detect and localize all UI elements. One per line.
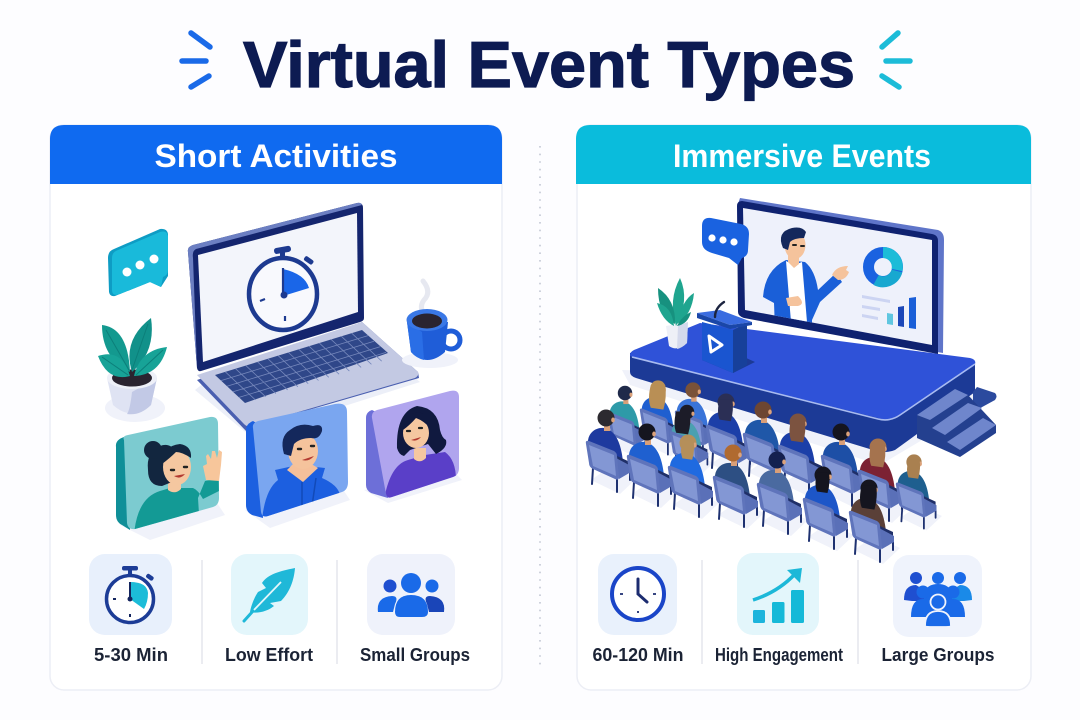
panel header: immersive events: Immersive Events [673,138,931,174]
icon: left title sparks [182,33,210,87]
icon: right title sparks [882,33,910,87]
panel: immersive events [576,125,1031,690]
icon: speech bubble [702,218,749,265]
title: Virtual Event Types [243,28,855,101]
stat: Large Groups: Large Groups [882,645,994,665]
icon: chat bubble [108,229,168,296]
panel header: short activities [50,125,502,184]
card: woman waving [116,417,225,540]
card: woman with dark hair [364,391,462,503]
screen text lines and bars [862,295,916,329]
icon: podium [697,302,755,373]
stat: 60-120 Min: 60-120 Min [592,645,684,665]
icon: stage plant [657,278,694,349]
illustration: laptop [188,203,420,436]
stat: Small Groups [360,554,470,665]
panel: short activities [50,125,502,690]
stat: Low Effort [225,554,313,665]
screen presenter [763,228,916,330]
screen donut chart [868,252,898,282]
stat: Low Effort: Low Effort [225,645,313,665]
dotted centre divider [539,146,541,670]
stat: High Engagement [715,553,843,665]
stat: 60-120 Min [592,554,684,665]
icon: stopwatch on laptop screen [249,245,317,330]
icon: coffee mug [402,281,460,368]
icon: potted plant [98,318,167,422]
stat: High Engagement: High Engagement [715,645,843,665]
stat: Large Groups [882,555,994,665]
laptop keyboard [215,330,392,403]
illustration: stage [622,323,990,465]
stat: Small Groups: Small Groups [360,645,470,665]
stat: 5-30 Min: 5-30 Min [94,645,168,665]
illustration: stage steps [917,387,996,457]
illustration: presentation screen [737,198,944,354]
stat: 5-30 Min [89,554,172,665]
card: man in hoodie [245,404,350,528]
illustration: audience in chairs [586,380,942,564]
panel header: immersive events [576,125,1031,184]
panel header: short activities: Short Activities [154,138,398,174]
